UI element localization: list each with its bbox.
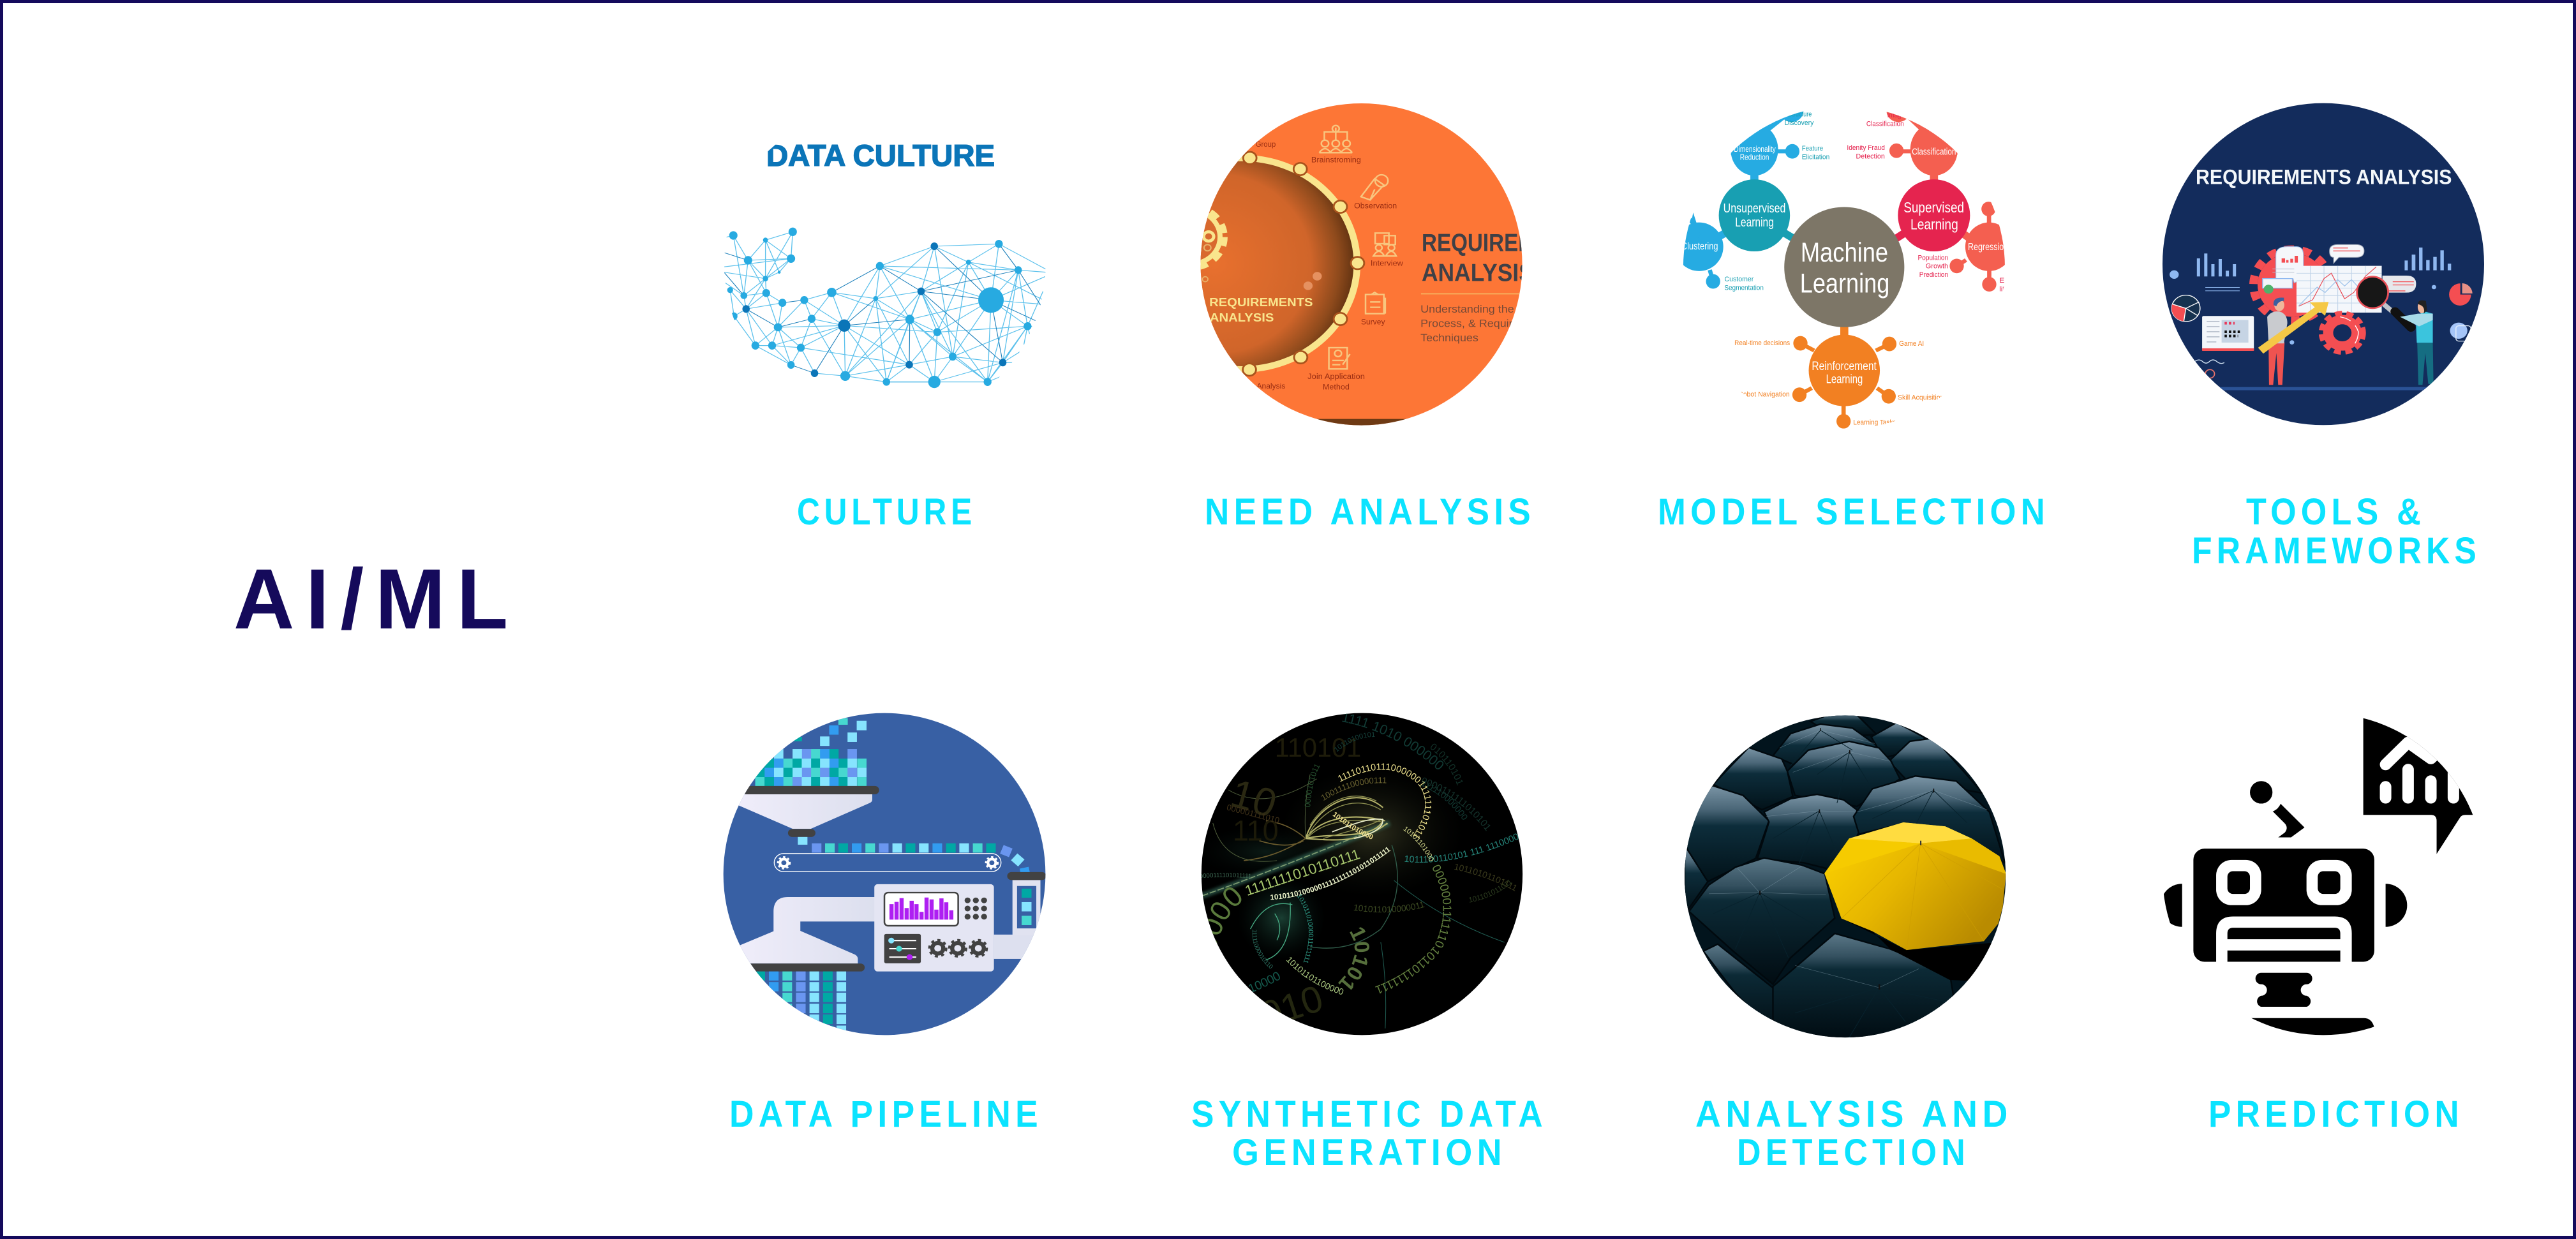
label: synthetic data generation: GENERATION bbox=[1232, 1132, 1507, 1173]
dashboard card bbox=[2202, 316, 2254, 351]
leaf labels: Real-time decisions bbox=[1734, 338, 1790, 347]
leaf labels: Prediction bbox=[1919, 271, 1948, 279]
leaf labels: Detection bbox=[1856, 152, 1885, 160]
label: analysis and detection bbox=[1695, 1094, 2013, 1173]
label: synthetic data generation bbox=[1191, 1094, 1547, 1173]
leaf labels: Idenity Fraud bbox=[1847, 144, 1885, 152]
right heading: ANALYSIS bbox=[1422, 259, 1534, 286]
icon: robot head bbox=[2161, 849, 2407, 961]
person: right bbox=[2400, 300, 2434, 385]
node titles: Learning bbox=[1800, 269, 1889, 299]
screen with bar chart bbox=[884, 893, 958, 926]
panel: culture bbox=[724, 138, 1045, 388]
icon: gear bbox=[1201, 209, 1228, 282]
binary text spirals: 11111000010110 bbox=[1252, 930, 1273, 968]
binary text spirals: 110 bbox=[1233, 815, 1279, 847]
binary text spirals: 0000001111110101101111111 bbox=[1374, 862, 1454, 997]
binary text spirals: 10101 bbox=[1334, 923, 1374, 996]
label: data pipeline: DATA PIPELINE bbox=[729, 1094, 1043, 1135]
binary text spirals: 101101011011110 bbox=[1454, 864, 1516, 891]
label: tools and frameworks: FRAMEWORKS bbox=[2192, 530, 2481, 572]
node titles: Reduction bbox=[1740, 152, 1769, 162]
bar glyphs bbox=[2170, 248, 2451, 345]
method labels: Group bbox=[1256, 140, 1276, 149]
binary text spirals: 110101 bbox=[1275, 732, 1361, 762]
leaf labels: life bbox=[1999, 285, 2009, 293]
node titles: Unsupervised bbox=[1724, 202, 1785, 216]
line chart board bbox=[2297, 266, 2382, 313]
binary text spirals: 1111 1010 000000 bbox=[1342, 713, 1443, 769]
binary text spirals: 1010110110000011 bbox=[1197, 700, 1345, 997]
person: left bbox=[2267, 297, 2288, 385]
leaf labels bbox=[1725, 112, 2004, 426]
icon: chart speech bubble bbox=[2364, 708, 2501, 854]
leaf labels: Customer bbox=[1725, 275, 1753, 283]
large gear bbox=[2253, 249, 2330, 321]
inner title: ANALYSIS bbox=[1210, 311, 1274, 325]
yellow umbrella bbox=[1824, 822, 2006, 950]
node titles: Machine bbox=[1801, 237, 1888, 268]
node titles: Reinforcement bbox=[1812, 360, 1877, 373]
label: analysis and detection: DETECTION bbox=[1737, 1132, 1970, 1173]
network whale illustration bbox=[724, 228, 1045, 388]
binary text spirals: 010 bbox=[1256, 977, 1328, 1036]
output column bbox=[994, 872, 1046, 959]
fractal strands bbox=[1202, 775, 1505, 1028]
panel: machine learning diagram bbox=[1683, 111, 2005, 429]
binary text spirals: 101011010000011111111101011011111 bbox=[1270, 847, 1391, 900]
small gear bbox=[2321, 314, 2363, 352]
squiggle and ring bbox=[2194, 360, 2224, 378]
sub nodes bbox=[1683, 111, 1803, 288]
node titles: Dimensionality bbox=[1734, 144, 1776, 154]
method labels: Observation bbox=[1354, 202, 1397, 211]
panel: need analysis image bbox=[1201, 103, 1523, 426]
leaf labels: Elicitation bbox=[1802, 152, 1829, 161]
method labels: Analysis bbox=[1256, 382, 1285, 390]
method labels: Survey bbox=[1361, 318, 1385, 326]
binary text spirals: 0000011110101 bbox=[1227, 805, 1279, 823]
dark umbrellas bbox=[1685, 713, 2005, 1039]
node titles: Clustering bbox=[1681, 241, 1718, 252]
leaf labels: Feature bbox=[1802, 144, 1824, 152]
right heading: Process, & Requirements bbox=[1420, 317, 1551, 329]
panel: synthetic data image bbox=[1189, 700, 1544, 1053]
right circle glyph bbox=[2450, 323, 2471, 341]
method labels bbox=[1256, 140, 1404, 392]
label: culture: CULTURE bbox=[797, 491, 976, 533]
binary text spirals: 10101101000 bbox=[1402, 825, 1435, 863]
inner dark disc and ring bbox=[1201, 151, 1366, 376]
binary text spirals: 11110110111000000111111101011 bbox=[1336, 762, 1433, 841]
label: need analysis: NEED ANALYSIS bbox=[1205, 491, 1535, 533]
leaf labels: Robot Navigation bbox=[1738, 390, 1790, 398]
title: AI/ML: AI/ML bbox=[234, 552, 519, 647]
binary text spirals: 0000111101011111 bbox=[1201, 873, 1251, 878]
binary text spirals: 10000 bbox=[1246, 969, 1283, 996]
panel: tools and frameworks image bbox=[2163, 103, 2484, 425]
panel: prediction robot icon bbox=[2161, 708, 2501, 1053]
leaf labels: Game AI bbox=[1899, 339, 1924, 348]
leaf labels: Skill Acquisition bbox=[1898, 393, 1944, 401]
label: synthetic data generation: SYNTHETIC DATA bbox=[1191, 1094, 1547, 1135]
machine control panel bbox=[874, 884, 994, 972]
node titles: Regression bbox=[1968, 242, 2008, 253]
node titles: Classification bbox=[1912, 147, 1956, 157]
right heading: Understanding the What, bbox=[1420, 303, 1547, 315]
label: prediction: PREDICTION bbox=[2208, 1094, 2464, 1135]
right heading bbox=[1420, 234, 1523, 343]
binary text spirals bbox=[1189, 700, 1521, 1036]
leaf labels: Learning Tasks bbox=[1853, 418, 1896, 426]
panel: analysis and detection image bbox=[1685, 708, 2029, 1053]
binary text spirals: 1010110100001111111101 bbox=[1198, 703, 1314, 965]
label: model selection: MODEL SELECTION bbox=[1658, 491, 2050, 533]
right heading: Techniques bbox=[1420, 332, 1478, 344]
binary text spirals: 0000111111010101 bbox=[1422, 777, 1491, 831]
main nodes bbox=[1719, 179, 1790, 251]
icon: magnifier bbox=[2357, 277, 2411, 327]
binary text spirals: 10110100101 bbox=[1335, 732, 1375, 752]
panel: data pipeline image bbox=[715, 708, 1072, 1053]
binary text spirals: 0000101011 bbox=[1304, 764, 1320, 807]
pie charts bbox=[2171, 283, 2473, 322]
method labels: Interview bbox=[1371, 259, 1404, 268]
label: tools and frameworks bbox=[2192, 491, 2481, 572]
binary text spirals: 101011010000 bbox=[1332, 812, 1373, 840]
pipe arm and lower hopper bbox=[729, 897, 875, 972]
inner title bbox=[1210, 298, 1313, 322]
output data columns bbox=[756, 972, 846, 1035]
binary text spirals: 010110101 bbox=[1431, 744, 1463, 785]
node titles: Learning bbox=[1910, 217, 1958, 234]
leaf labels: Structure bbox=[1788, 110, 1812, 118]
icon: antenna bbox=[2250, 781, 2305, 838]
logo text: data culture: DATA CULTURE bbox=[766, 138, 995, 172]
image heading: REQUIREMENTS ANALYSIS bbox=[2196, 166, 2452, 189]
binary text spirals: 10011110000011111 bbox=[1322, 777, 1387, 801]
binary text spirals: 101011010000011 bbox=[1353, 899, 1426, 914]
binary text spirals: 1111111010110111 bbox=[1246, 850, 1360, 896]
node titles bbox=[1681, 144, 2008, 387]
binary text spirals: 1011100110101 111 1110000000 bbox=[1197, 701, 1521, 865]
node titles: Learning bbox=[1826, 373, 1863, 387]
binary text spirals: 0000 bbox=[1207, 887, 1242, 944]
label: tools and frameworks: TOOLS & bbox=[2246, 491, 2425, 533]
hopper bbox=[729, 786, 879, 845]
binary text spirals: 111110000000 bbox=[1421, 781, 1468, 820]
binary text spirals: 101101011011 bbox=[1468, 877, 1514, 905]
method labels: Brainstroming bbox=[1311, 156, 1361, 165]
label: analysis and detection: ANALYSIS AND bbox=[1695, 1094, 2013, 1135]
conveyor belt bbox=[774, 843, 1031, 877]
gears bbox=[930, 940, 986, 956]
leaf labels: Image bbox=[1887, 111, 1905, 119]
leaf labels: Estimated bbox=[1999, 276, 2034, 285]
connectors bbox=[1715, 168, 1970, 341]
speech bubbles bbox=[2263, 244, 2416, 293]
node titles: Supervised bbox=[1903, 200, 1964, 216]
leaf labels: Population bbox=[1918, 253, 1948, 262]
method labels: Method bbox=[1323, 383, 1350, 392]
leaf labels: Discovery bbox=[1785, 118, 1813, 127]
right heading: REQUIREMENTS bbox=[1422, 229, 1592, 256]
method icons bbox=[1320, 126, 1396, 369]
arrow bbox=[2258, 302, 2328, 353]
leaf labels: Segmentation bbox=[1725, 283, 1764, 292]
node titles: Learning bbox=[1735, 216, 1774, 230]
leaf labels: Classification bbox=[1866, 119, 1904, 128]
sliders bbox=[884, 934, 921, 963]
leaf labels: Growth bbox=[1926, 262, 1948, 271]
method labels: Join Application bbox=[1307, 372, 1365, 381]
icon: robot neck and base bbox=[2236, 973, 2377, 1053]
binary text spirals: 10 bbox=[1232, 782, 1275, 815]
data blocks falling into hopper bbox=[756, 718, 867, 786]
inner title: REQUIREMENTS bbox=[1209, 296, 1313, 309]
